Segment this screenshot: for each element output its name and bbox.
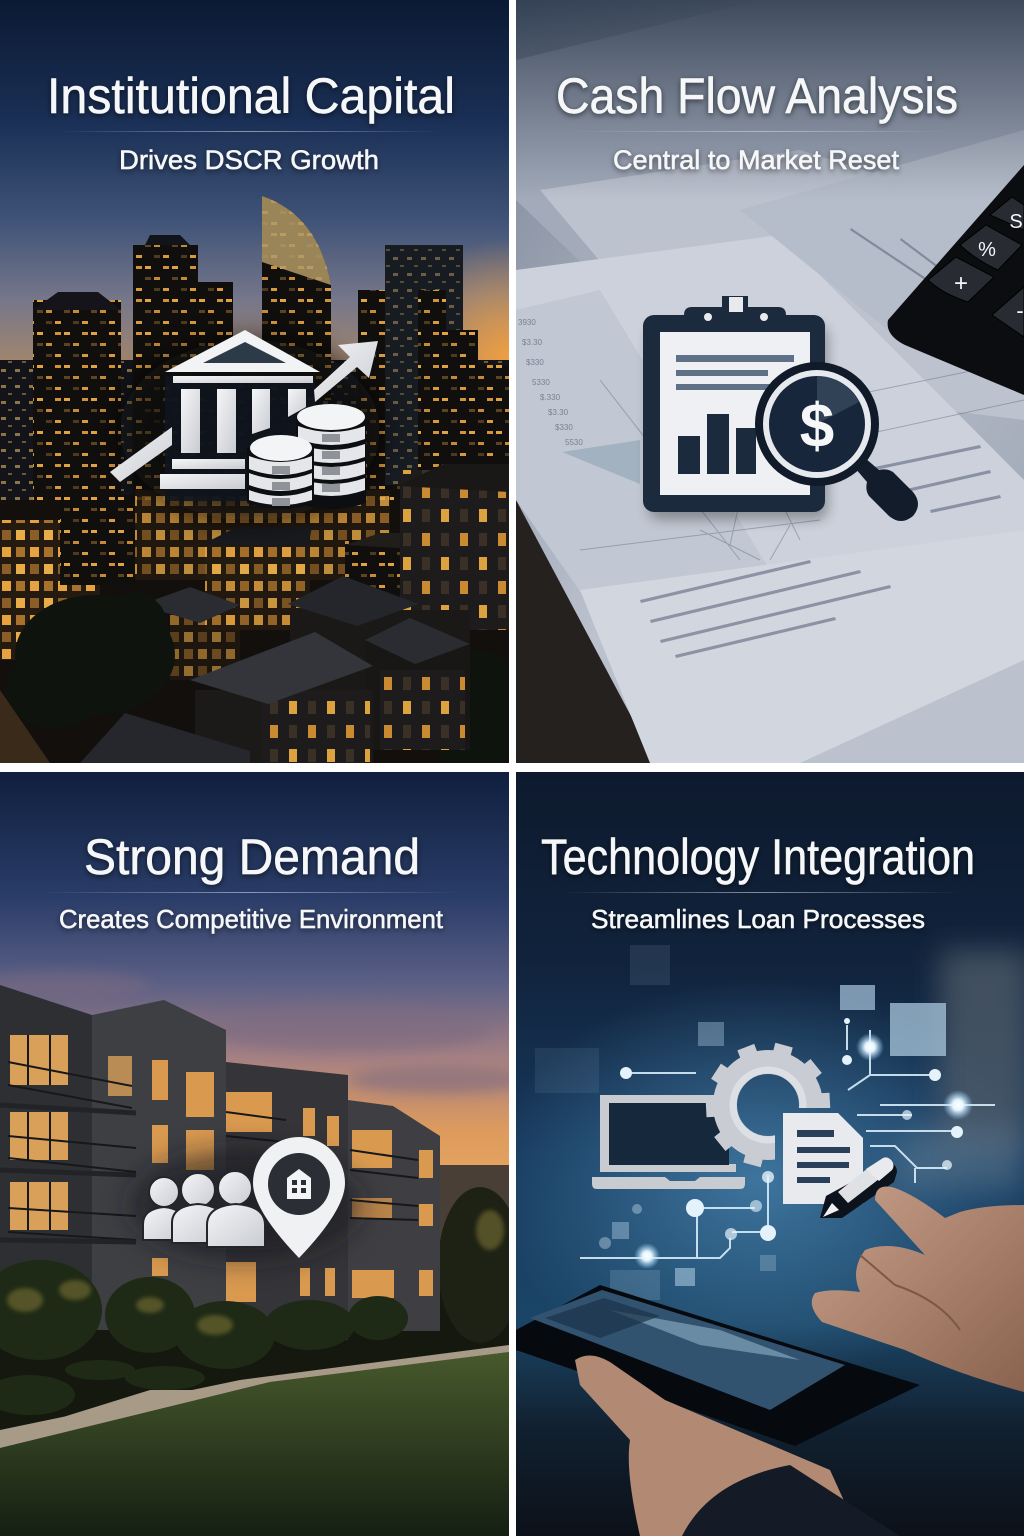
- circuit lines: [580, 1025, 995, 1258]
- paper figures and table rows: $3.30: [548, 408, 569, 417]
- top shade: [516, 0, 1024, 200]
- paper figures and table rows: $330: [526, 358, 544, 367]
- clipboard body: [643, 315, 825, 512]
- divider: [40, 892, 460, 893]
- people group: [143, 1171, 265, 1247]
- mid-rise apartment blocks: [0, 464, 509, 763]
- dark desk corner: [516, 500, 656, 763]
- mini bar chart: [678, 414, 756, 474]
- distant city: [0, 360, 509, 500]
- glow nodes: [634, 1033, 973, 1269]
- icon: pen: [820, 1157, 897, 1218]
- icon: bank with rising arrow and coins: [110, 330, 380, 520]
- text lines: [676, 355, 794, 390]
- subheading: Streamlines Loan Processes: Streamlines Loan Processes: [591, 904, 925, 934]
- blurred right wall: [900, 950, 1024, 1190]
- icon: gear: [706, 1043, 830, 1167]
- house glyph: [287, 1169, 311, 1199]
- paper figures and table rows: 5330: [532, 378, 550, 387]
- paper figures and table rows: [518, 228, 1001, 658]
- bank columns: [160, 376, 313, 489]
- magnifier lens: [755, 362, 879, 486]
- icon: clipboard with chart and magnifier: [643, 296, 918, 521]
- foreground rooftops: [0, 576, 470, 763]
- dollar glyph: $: [800, 392, 834, 461]
- balcony windows: [10, 1035, 132, 1230]
- paper figures and table rows: 5530: [565, 438, 583, 447]
- rising arrow upper: [314, 341, 378, 402]
- rising arrow lower: [110, 427, 172, 482]
- paper chart triangle: [562, 440, 640, 484]
- divider: [604, 131, 916, 132]
- subheading: Central to Market Reset: Central to Market Reset: [613, 145, 899, 175]
- paper figures and table rows: $3.30: [522, 338, 543, 347]
- background: dusk sky: [0, 0, 509, 400]
- paper figures and table rows: $330: [555, 423, 573, 432]
- tablet: [516, 1285, 920, 1446]
- heading: Institutional Capital: Institutional Capital: [47, 68, 455, 124]
- coin stack tall: [296, 404, 366, 509]
- magnifier handle: [855, 458, 918, 521]
- icon: people and location pin: [130, 1137, 360, 1260]
- trees: [15, 595, 175, 676]
- apartment building: [0, 985, 440, 1340]
- path: [0, 1345, 509, 1448]
- skyline towers: [33, 196, 509, 515]
- calculator: [888, 165, 1024, 395]
- panel: Technology Integration: [490, 772, 1024, 1536]
- lawn: [0, 1352, 509, 1536]
- sleeve: [682, 1465, 900, 1536]
- background: sunset sky: [0, 772, 509, 1192]
- circuit nodes: [599, 1018, 963, 1249]
- heading: Strong Demand: Strong Demand: [84, 829, 420, 885]
- calculator: -: [1016, 298, 1024, 323]
- shrubs and trees: [0, 1260, 408, 1415]
- heading: Cash Flow Analysis: Cash Flow Analysis: [556, 68, 958, 124]
- panel: Cash Flow Analysis: [516, 0, 1024, 763]
- location pin: [253, 1137, 345, 1258]
- clouds: [0, 971, 530, 1094]
- calculator: %: [978, 239, 996, 261]
- calculator: S: [1009, 211, 1023, 233]
- coin stack short: [247, 435, 314, 509]
- divider: [60, 131, 440, 132]
- calculator key glyphs: +: [954, 270, 968, 297]
- clipboard clip: [684, 296, 786, 315]
- background: desk: [516, 0, 1024, 763]
- balcony rails: [8, 1035, 418, 1240]
- subheading: Drives DSCR Growth: Drives DSCR Growth: [119, 145, 379, 175]
- background: digital blue: [516, 772, 1024, 1536]
- hand: lower holding tablet: [575, 1355, 860, 1536]
- bank pediment: [165, 330, 320, 372]
- icon: document: [783, 1113, 863, 1204]
- tree highlights: [7, 1210, 504, 1335]
- background building and ground: [0, 1165, 509, 1450]
- divider: [560, 892, 960, 893]
- background trees: [438, 1187, 522, 1343]
- paper figures and table rows: $.330: [540, 393, 561, 402]
- panel: Strong Demand: [0, 772, 530, 1536]
- icon: laptop: [592, 1095, 745, 1189]
- subheading: Creates Competitive Environment: Creates Competitive Environment: [59, 904, 444, 934]
- papers stack: [516, 0, 1024, 763]
- floating translucent tiles: [535, 945, 946, 1300]
- sunset glow: [463, 245, 509, 360]
- paper figures and table rows: 3930: [518, 318, 536, 327]
- central glow: [490, 980, 1024, 1380]
- panel: Institutional Capital: [0, 0, 530, 770]
- hand: upper pointing: [812, 1186, 1024, 1392]
- paper ruling lines: [580, 360, 1024, 560]
